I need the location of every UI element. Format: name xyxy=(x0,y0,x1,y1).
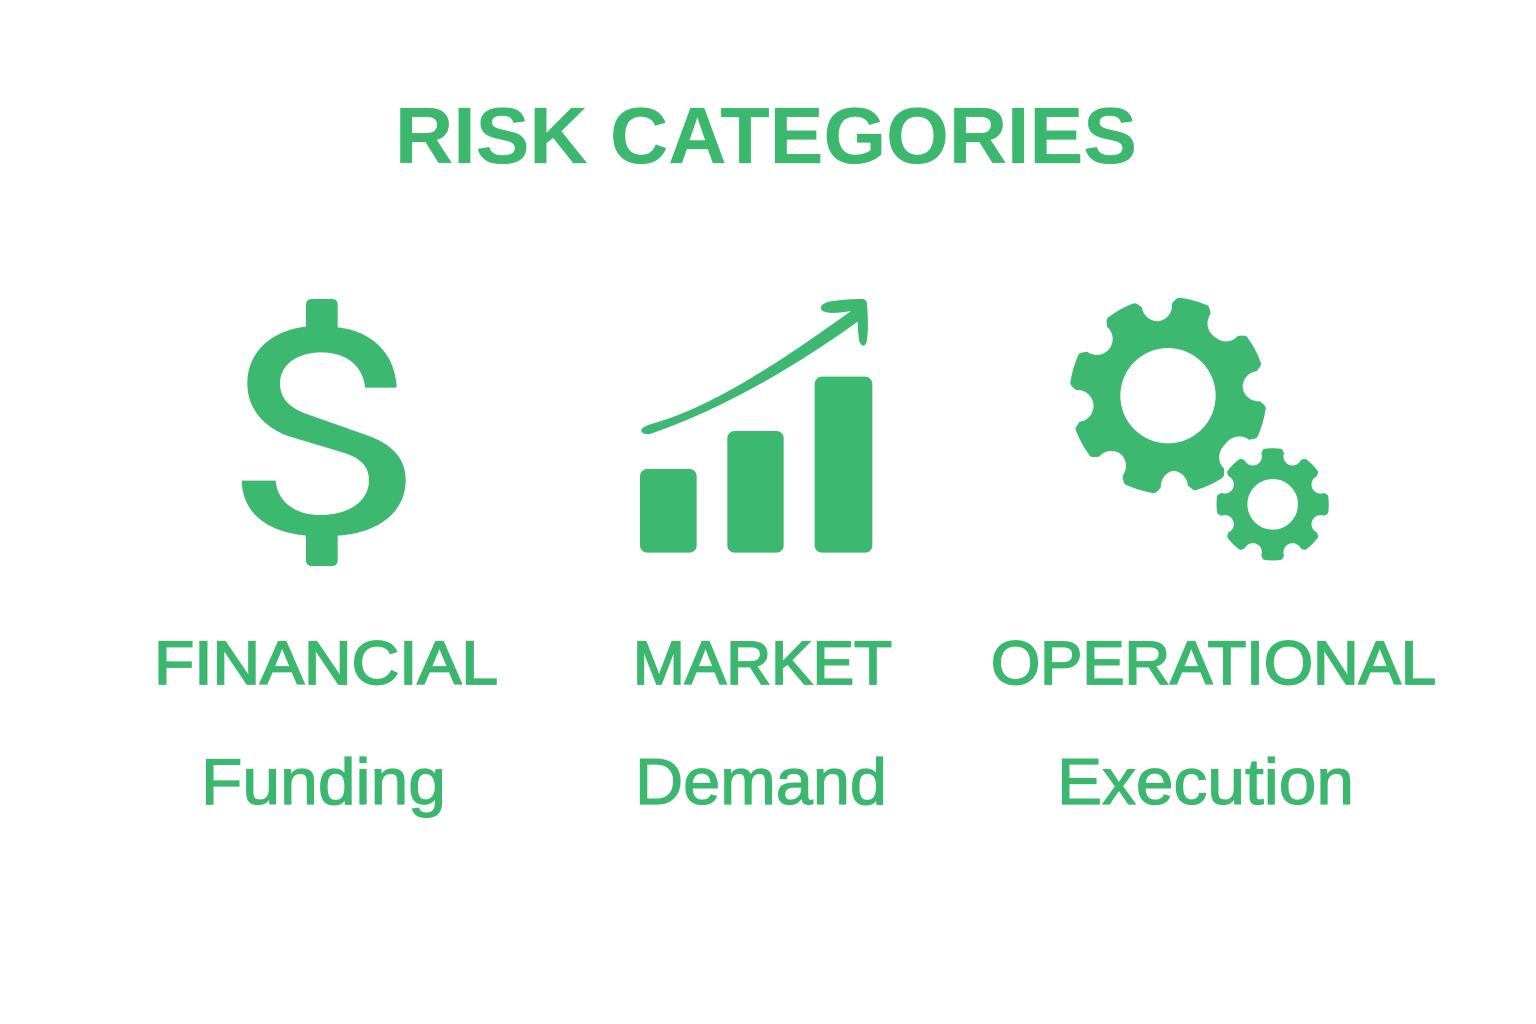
large gear xyxy=(1065,293,1271,498)
panel: financial xyxy=(154,299,498,818)
icon: rising bar chart xyxy=(640,299,872,553)
bar: medium xyxy=(727,431,784,553)
small gear xyxy=(1217,448,1329,560)
icon: dollar sign xyxy=(242,299,406,566)
title: RISK CATEGORIES xyxy=(395,91,1137,180)
label: operational: OPERATIONAL xyxy=(991,629,1436,697)
sublabel: demand: Demand xyxy=(635,745,887,818)
sublabel: execution: Execution xyxy=(1057,745,1354,818)
icon: gears xyxy=(1065,293,1329,560)
panel: market xyxy=(633,299,892,818)
panel: operational xyxy=(991,293,1436,818)
arrow: upward trend xyxy=(641,299,868,434)
bar: small xyxy=(640,469,697,553)
bar: large xyxy=(815,377,872,553)
label: financial: FINANCIAL xyxy=(154,629,498,697)
sublabel: funding: Funding xyxy=(201,745,446,818)
label: market: MARKET xyxy=(633,629,892,697)
